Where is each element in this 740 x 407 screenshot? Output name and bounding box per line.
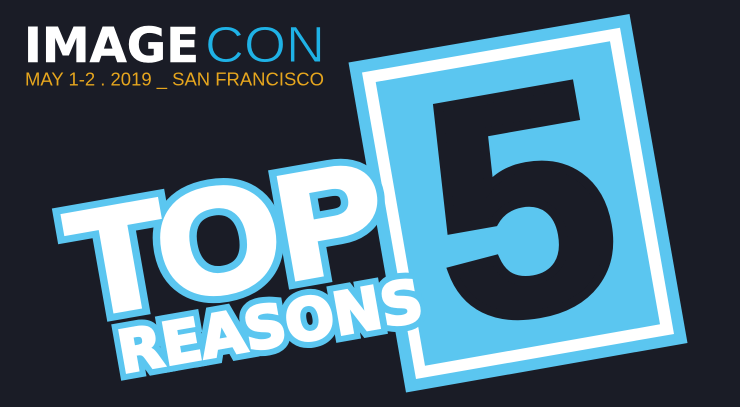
heading: REASONS: REASONS	[113, 266, 428, 387]
event date and place: MAY 1-2 . 2019 _ SAN FRANCISCO	[25, 68, 324, 90]
heading: TOP: TOP	[57, 131, 396, 348]
number 5: 5	[402, 13, 640, 392]
logo: IMAGECON	[24, 16, 325, 74]
logo: IMAGECON: IMAGE	[24, 18, 199, 74]
heading: TOP: TOP	[57, 131, 396, 348]
heading: REASONS: REASONS	[113, 266, 428, 387]
logo: IMAGECON: CON	[205, 16, 325, 73]
